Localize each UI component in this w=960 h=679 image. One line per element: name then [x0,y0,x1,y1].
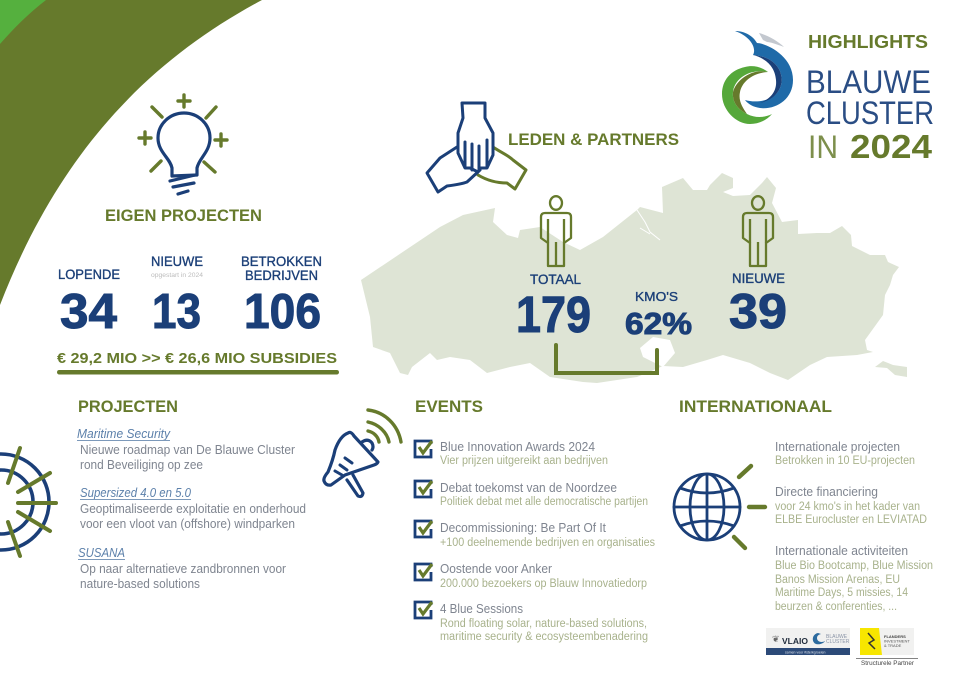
stats: eigen projecten: opgestart in 2024 [151,273,204,279]
stats: leden en partners: 62% [625,306,692,341]
logo: VLAIO and Blauwe Cluster: CLUSTER [826,639,850,645]
panel: events [415,397,655,643]
logo: VLAIO and Blauwe Cluster: BLAUWE [826,634,848,640]
international activities [775,544,933,613]
direct funding [775,485,927,526]
subsidies callout [57,351,339,374]
project: supersized: Supersized 4.0 en 5.0 [80,486,191,500]
event: decommissioning: Decommissioning: Be Part Of It [440,521,606,535]
stats: eigen projecten: 106 [244,285,321,339]
event: blue sessions: Rond floating solar, nature-based solutions, [440,618,647,630]
logo: VLAIO and Blauwe Cluster: VLAIO [782,636,808,646]
project: maritime security [77,427,295,472]
subsidies callout: € 29,2 MIO >> € 26,6 MIO SUBSIDIES [57,351,337,367]
icon: megaphone [324,410,401,497]
project: susana: SUSANA [78,546,125,560]
stats: eigen projecten [58,253,322,339]
icon: wind turbine rings [0,448,56,556]
bracket connecting totaal and kmo [556,345,657,373]
icon: person totaal [541,196,571,266]
international activities: Maritime Days, 5 missies, 14 [775,587,909,599]
heading: events: EVENTS [415,397,483,416]
international projects: Internationale projecten [775,440,900,454]
event: oostende voor anker: 200.000 bezoekers op Blauw Innovatiedorp [440,578,647,590]
direct funding: ELBE Eurocluster en LEVIATAD [775,514,927,526]
international activities: Blue Bio Bootcamp, Blue Mission [775,560,933,572]
icon: person nieuwe [743,196,773,266]
international activities: Internationale activiteiten [775,544,908,558]
stats: leden en partners: TOTAAL [530,272,581,287]
logo and title: IN [808,129,838,165]
stats: eigen projecten: 13 [152,285,201,339]
logo and title [722,31,934,165]
logo: VLAIO and Blauwe Cluster: ❦ [772,634,780,644]
logo: Flanders Investment and Trade: INVESTMENT [884,638,910,644]
heading: internationaal: INTERNATIONAAL [679,397,832,416]
heading: eigen projecten: EIGEN PROJECTEN [105,207,262,225]
international activities: beurzen & conferenties, ... [775,601,897,613]
project: susana: nature-based solutions [80,577,200,591]
stats: eigen projecten: BEDRIJVEN [245,267,318,283]
heading: leden en partners: LEDEN & PARTNERS [508,130,679,149]
international activities: Banos Mission Arenas, EU [775,574,900,586]
title text: HIGHLIGHTS [808,32,928,52]
international projects: Betrokken in 10 EU-projecten [775,455,915,467]
direct funding: Directe financiering [775,485,878,499]
icon: three hands [427,103,526,192]
stats: leden en partners: 39 [729,285,787,339]
event: debat noordzee: Politiek debat met alle democratische partijen [440,496,648,508]
international projects [775,440,915,467]
project: susana: Op naar alternatieve zandbronnen voor [80,562,286,576]
logo: Flanders Investment and Trade [856,628,918,667]
logo and title: 2024 [850,128,933,165]
project: susana [78,546,286,591]
event: blue sessions: 4 Blue Sessions [440,602,523,616]
logo: VLAIO and Blauwe Cluster: samen voor #sterkgroeien [785,650,826,654]
event: blue sessions [415,602,648,643]
event: decommissioning: +100 deelnemende bedrijven en organisaties [440,537,655,549]
logo mark [722,31,793,124]
project: supersized: Geoptimaliseerde exploitatie en onderhoud [80,502,306,516]
logo: VLAIO and Blauwe Cluster [766,628,850,655]
stats: leden en partners: 179 [516,286,591,343]
event: debat noordzee [415,481,648,508]
corner swoosh [0,0,262,305]
icon: globe [674,466,765,548]
stats: leden en partners [516,271,787,343]
logo and title: BLAUWE [806,64,931,100]
event: decommissioning [415,521,655,549]
event: blue sessions: maritime security & ecosysteembenadering [440,631,648,643]
panel: projecten [77,397,306,591]
stats: eigen projecten: LOPENDE [58,266,120,282]
event: blue innovation awards: Vier prijzen uitgereikt aan bedrijven [440,455,608,467]
logo: Flanders Investment and Trade: Structurele Partner [861,660,915,667]
stats: eigen projecten: BETROKKEN [241,253,322,269]
event: oostende voor anker [415,562,647,590]
stats: eigen projecten: NIEUWE [151,253,203,269]
event: debat noordzee: Debat toekomst van de Noordzee [440,481,617,495]
heading: projecten: PROJECTEN [78,397,178,416]
event: blue innovation awards: Blue Innovation Awards 2024 [440,440,595,454]
project: maritime security: Nieuwe roadmap van De Blauwe Cluster [80,443,295,457]
logo: Flanders Investment and Trade: & TRADE [884,643,902,648]
stats: leden en partners: NIEUWE [732,271,785,286]
icon: light bulb [139,95,227,194]
event: oostende voor anker: Oostende voor Anker [440,562,552,576]
project: maritime security: Maritime Security [77,427,171,441]
project: supersized: voor een vloot van (offshore) windparken [80,517,295,531]
panel: internationaal [674,397,933,613]
project: maritime security: rond Beveiliging op zee [80,458,203,472]
project: supersized [80,486,306,531]
stats: leden en partners: KMO'S [635,289,678,304]
direct funding: voor 24 kmo's in het kader van [775,501,920,513]
stats: eigen projecten: 34 [60,285,117,339]
logo: Flanders Investment and Trade: FLANDERS [884,634,906,639]
map of Flanders [361,173,907,383]
event: blue innovation awards [415,440,608,467]
logo and title: CLUSTER [806,95,934,131]
